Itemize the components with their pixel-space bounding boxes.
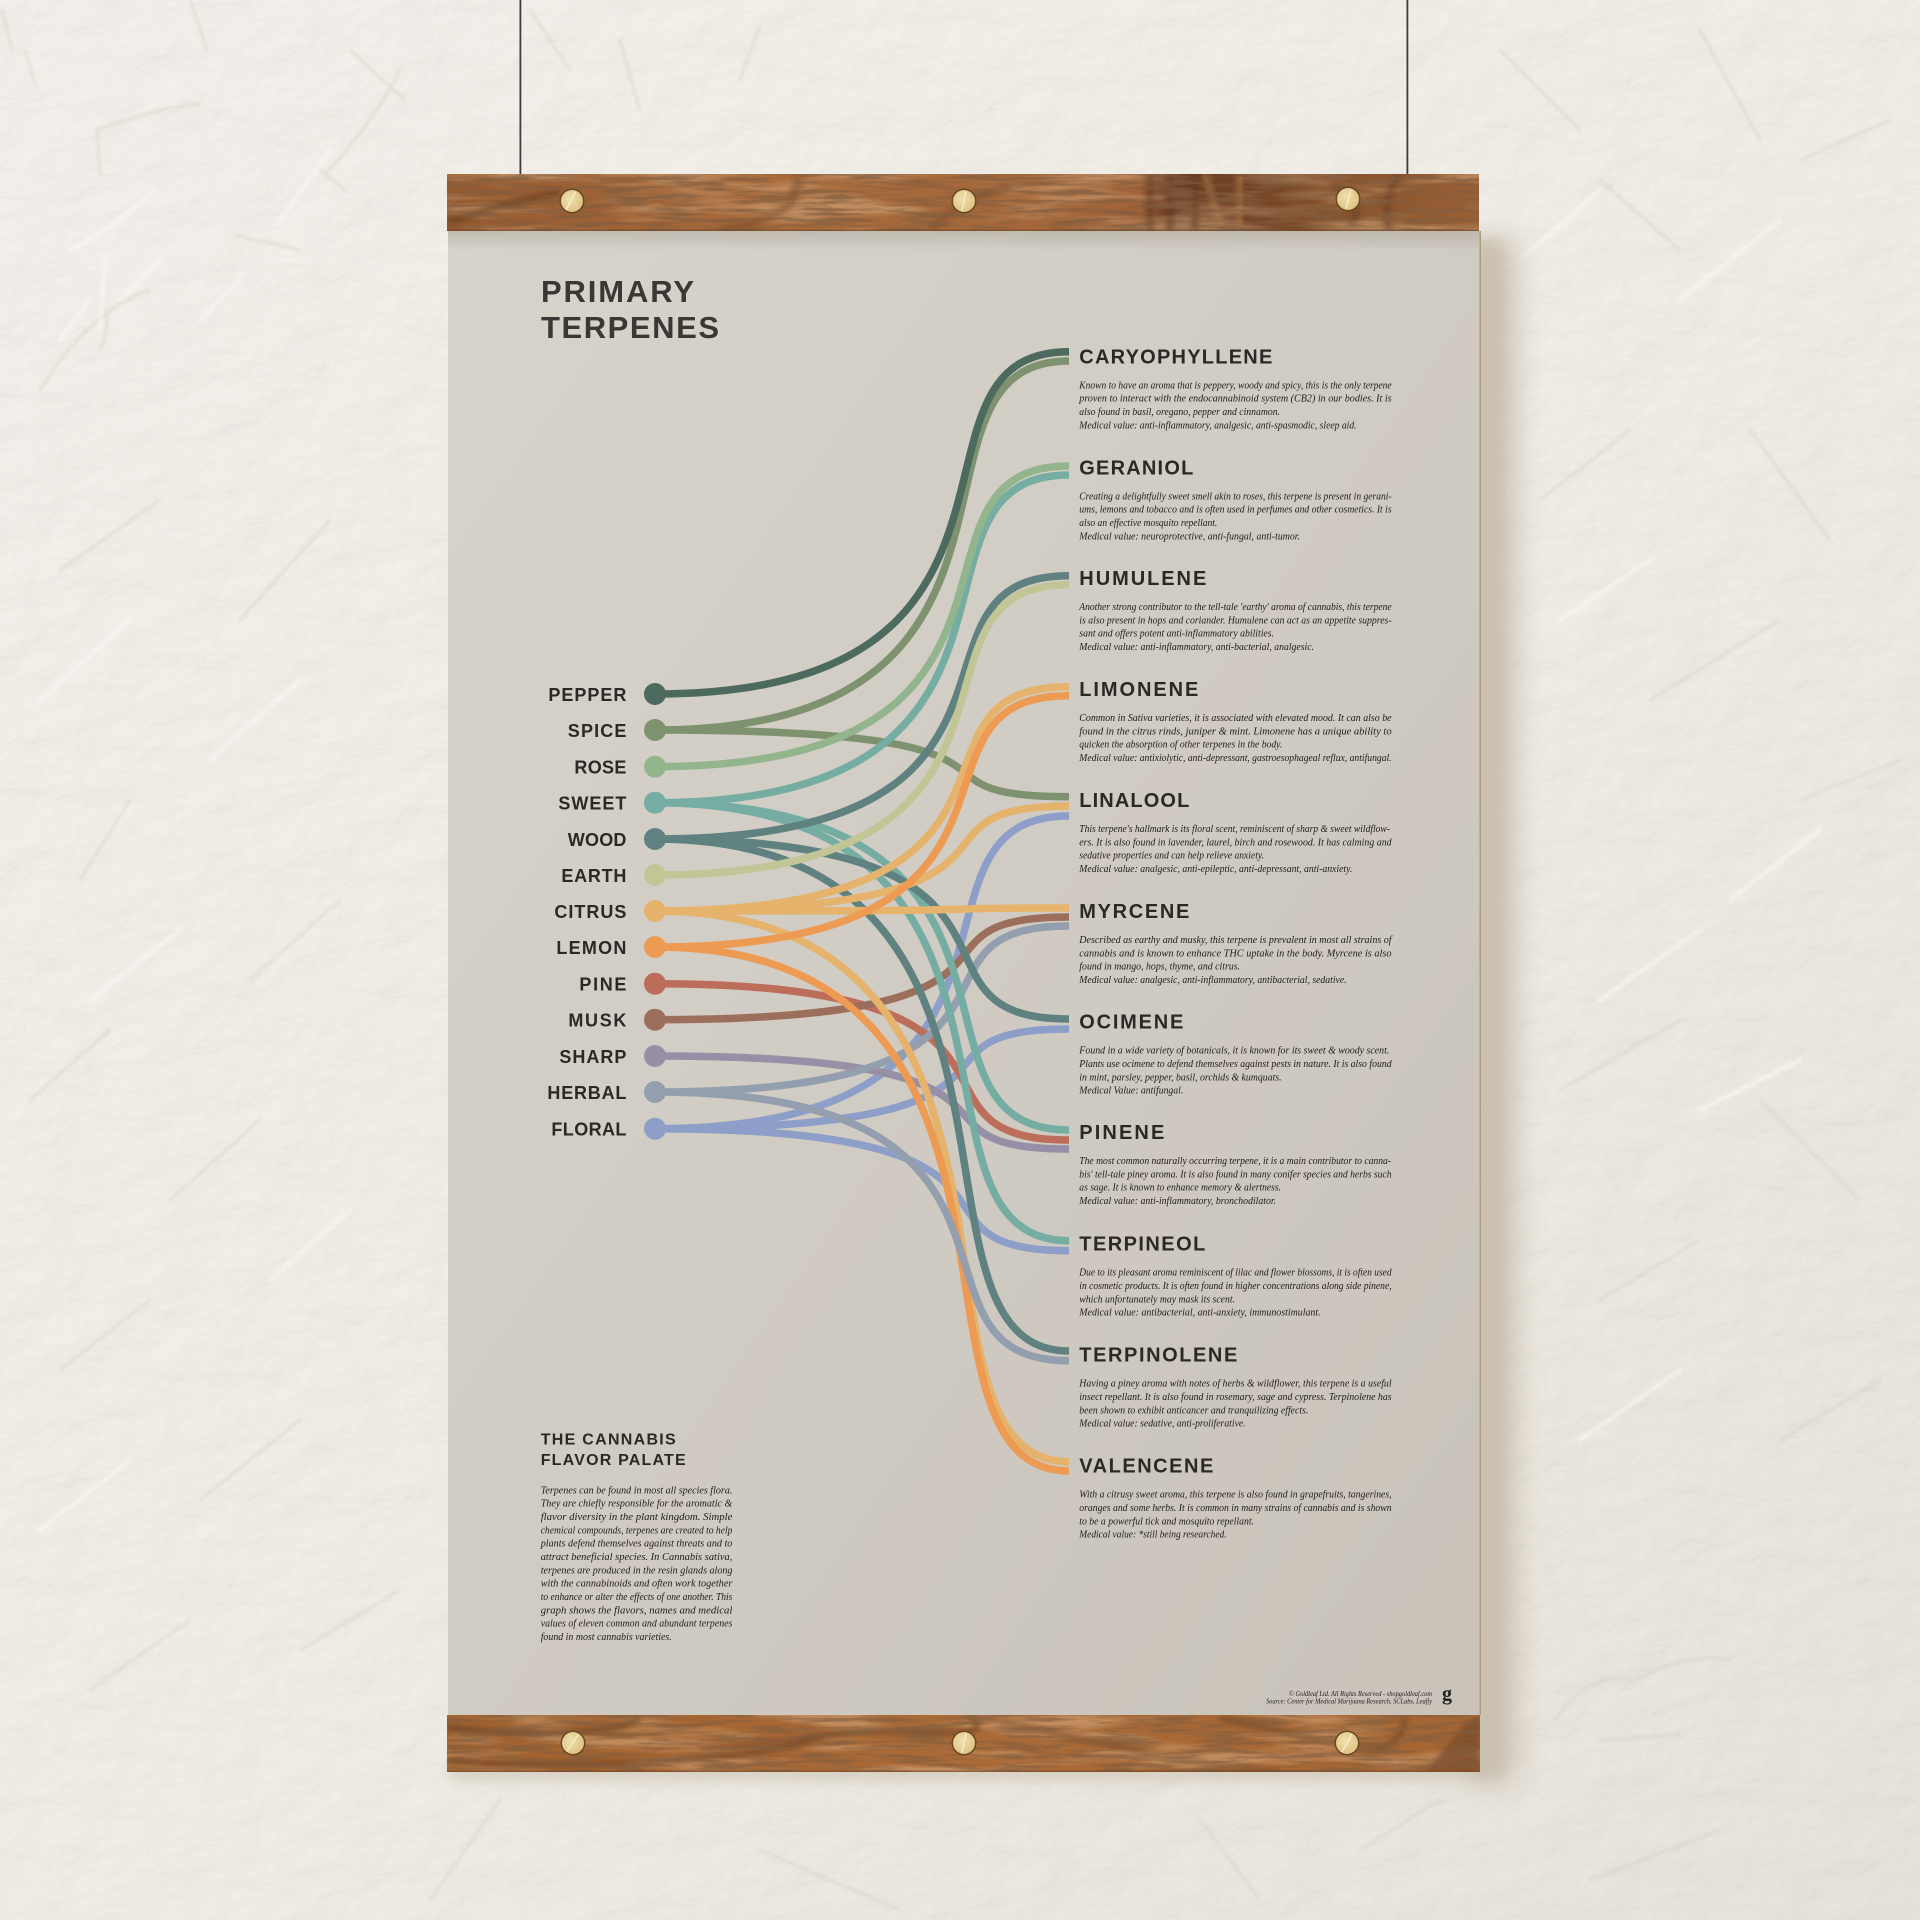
terpene: humulene: is also present in hops and coriander. Humulene can act as an appetite suppres- (1079, 614, 1392, 626)
intro text: terpenes are produced in the resin glands along (541, 1564, 733, 1576)
flavor: musk (568, 1009, 666, 1031)
flavor: sharp (559, 1045, 666, 1067)
terpene: geraniol: Medical value: neuroprotective, anti-fungal, anti-tumor. (1078, 530, 1300, 542)
flavor: herbal: HERBAL (547, 1083, 626, 1103)
terpene: pinene: The most common naturally occurring terpene, it is a main contributor to canna- (1079, 1155, 1391, 1167)
flavor: herbal (547, 1081, 666, 1103)
intro text: chemical compounds, terpenes are created to help (541, 1524, 733, 1536)
hanging wire right (1406, 0, 1408, 174)
terpene: ocimene: Found in a wide variety of botanicals, it is known for its sweet & woody scent. (1078, 1045, 1389, 1057)
flavor: pine: PINE (579, 975, 626, 995)
terpene: ocimene: OCIMENE (1079, 1012, 1183, 1034)
title (541, 274, 719, 345)
terpene: caryophyllene: also found in basil, oregano, pepper and cinnamon. (1079, 406, 1280, 418)
flavor: pepper (548, 683, 666, 705)
terpene: geraniol: GERANIOL (1079, 457, 1193, 479)
terpene: limonene: Common in Sativa varieties, it is associated with elevated mood. It can also be (1079, 712, 1392, 724)
top wooden bar (447, 174, 1479, 231)
terpene: linalool: This terpene's hallmark is its floral scent, reminiscent of sharp & sweet wildflow- (1079, 823, 1390, 835)
terpene: pinene (1078, 1122, 1392, 1207)
terpene: terpineol: Due to its pleasant aroma reminiscent of lilac and flower blossoms, it is often used (1078, 1267, 1392, 1279)
flavor: floral: FLORAL (551, 1120, 626, 1140)
brass screws (560, 186, 1360, 1756)
terpene: terpineol: in cosmetic products. It is often found in higher concentrations along side pinene, (1079, 1280, 1392, 1292)
terpene: terpinolene (1078, 1345, 1392, 1430)
terpene: geraniol (1078, 457, 1392, 542)
terpene: limonene: found in the citrus rinds, juniper & mint. Limonene has a unique ability to (1079, 725, 1392, 737)
terpene: terpinolene: Medical value: sedative, anti-proliferative. (1078, 1418, 1246, 1430)
terpene: geraniol: ums, lemons and tobacco and is often used in perfumes and other cosmetics. It is (1079, 504, 1392, 516)
flavor: citrus (554, 900, 666, 922)
flavor: rose (574, 756, 666, 778)
terpene: terpinolene: been shown to exhibit anticancer and tranquilizing effects. (1079, 1404, 1308, 1416)
terpene: pinene: PINENE (1079, 1122, 1164, 1144)
intro heading (541, 1432, 686, 1469)
terpene: terpineol: Medical value: antibacterial, anti-anxiety, immunostimulant. (1078, 1307, 1321, 1319)
intro text: Terpenes can be found in most all species flora. (541, 1484, 732, 1496)
flavor: wood: WOOD (568, 830, 626, 850)
intro text: attract beneficial species. In Cannabis sativa, (541, 1551, 733, 1563)
terpene: ocimene: Plants use ocimene to defend themselves against pests in nature. It is also found (1078, 1058, 1392, 1070)
intro text (540, 1484, 733, 1643)
intro text: to enhance or alter the effects of one another. This (541, 1591, 732, 1603)
footer credits: © Goldleaf Ltd. All Rights Reserved - shopgoldleaf.com (1289, 1689, 1432, 1698)
terpene: humulene: Medical value: anti-inflammatory, anti-bacterial, analgesic. (1078, 641, 1314, 653)
terpene: caryophyllene: CARYOPHYLLENE (1079, 346, 1272, 368)
flavor: pine (579, 973, 666, 995)
flavor: spice: SPICE (568, 721, 626, 741)
terpene: myrcene: Medical value: analgesic, anti-inflammatory, antibacterial, sedative. (1078, 974, 1347, 986)
terpene: valencene: Medical value: *still being researched. (1078, 1529, 1227, 1541)
terpene: linalool: sedative properties and can help relieve anxiety. (1079, 850, 1264, 862)
intro text: plants defend themselves against threats and to (540, 1538, 733, 1550)
terpene: valencene: VALENCENE (1079, 1456, 1213, 1478)
intro text: They are chiefly responsible for the aromatic & (541, 1498, 733, 1510)
poster sheet (448, 231, 1481, 1715)
terpene: linalool: LINALOOL (1079, 790, 1189, 812)
terpene: terpinolene: insect repellant. It is also found in rosemary, sage and cypress. Terpinolene has (1079, 1391, 1392, 1403)
terpene: limonene: Medical value: antixiolytic, anti-depressant, gastroesophageal reflux, antifungal. (1078, 752, 1392, 764)
terpene: caryophyllene (1078, 346, 1392, 431)
terpene: linalool: ers. It is also found in lavender, laurel, birch and rosewood. It has calming and (1079, 836, 1392, 848)
intro heading: THE CANNABIS (541, 1432, 676, 1449)
terpene: terpineol (1078, 1234, 1392, 1319)
terpene: linalool (1078, 790, 1392, 875)
terpene: caryophyllene: proven to interact with the endocannabinoid system (CB2) in our bodies. It is (1078, 393, 1392, 405)
terpene: ocimene: Medical Value: antifungal. (1078, 1085, 1183, 1097)
terpene: terpineol: TERPINEOL (1079, 1234, 1205, 1256)
terpene: terpinolene: TERPINOLENE (1079, 1345, 1237, 1367)
flavor: spice (568, 719, 666, 741)
logo: g: g (1442, 1683, 1452, 1705)
terpene: geraniol: Creating a delightfully sweet smell akin to roses, this terpene is present in gerani- (1079, 490, 1392, 502)
flavor: sweet (558, 792, 666, 814)
terpene: myrcene: Described as earthy and musky, this terpene is prevalent in most all strains of (1078, 934, 1393, 946)
intro text: graph shows the flavors, names and medical (541, 1604, 732, 1616)
intro panel: the cannabis flavor palate (540, 1432, 733, 1643)
flavor: earth: EARTH (561, 866, 626, 886)
terpene: pinene: bis' tell-tale piney aroma. It is also found in many conifer species and herbs such (1079, 1168, 1392, 1180)
flavor: sweet: SWEET (558, 794, 626, 814)
flavor: lemon: LEMON (556, 938, 626, 958)
flavor: citrus: CITRUS (554, 902, 626, 922)
intro text: flavor diversity in the plant kingdom. Simple (541, 1511, 733, 1523)
terpene: terpineol: which unfortunately may mask its scent. (1079, 1293, 1235, 1305)
wall shadow behind poster (450, 240, 1516, 1782)
flavor: earth (561, 864, 666, 886)
terpene: limonene: LIMONENE (1079, 679, 1198, 701)
terpene: ocimene (1078, 1012, 1392, 1097)
intro heading: FLAVOR PALATE (541, 1452, 686, 1469)
flavor: wood (568, 828, 666, 850)
terpene: valencene: With a citrusy sweet aroma, this terpene is also found in grapefruits, tangerines, (1079, 1489, 1392, 1501)
terpene: linalool: Medical value: analgesic, anti-epileptic, anti-depressant, anti-anxiety. (1078, 863, 1352, 875)
flavor: musk: MUSK (568, 1011, 626, 1031)
terpene: geraniol: also an effective mosquito repellant. (1079, 517, 1217, 529)
terpene: limonene: quicken the absorption of other terpenes in the body. (1079, 739, 1282, 751)
bottom wooden bar (447, 1715, 1480, 1772)
terpene: valencene: oranges and some herbs. It is common in many strains of cannabis and is shown (1079, 1502, 1392, 1514)
terpene: myrcene (1078, 901, 1393, 986)
terpene: caryophyllene: Medical value: anti-inflammatory, analgesic, anti-spasmodic, sleep aid. (1078, 419, 1357, 431)
terpene: valencene: to be a powerful tick and mosquito repellant. (1079, 1515, 1254, 1527)
terpene: terpinolene: Having a piney aroma with notes of herbs & wildflower, this terpene is a useful (1078, 1378, 1392, 1390)
terpene: humulene: HUMULENE (1079, 568, 1206, 590)
intro text: with the cannabinoids and often work together (541, 1578, 733, 1590)
flavor: pepper: PEPPER (548, 685, 626, 705)
chart: flavor-to-terpene flow curves (655, 352, 1069, 1471)
terpene: valencene (1078, 1456, 1392, 1541)
intro text: values of eleven common and abundant terpenes (541, 1618, 732, 1630)
terpene: ocimene: in mint, parsley, pepper, basil, orchids & kumquats. (1079, 1071, 1282, 1083)
intro text: found in most cannabis varieties. (541, 1631, 672, 1643)
terpene: humulene: sant and offers potent anti-inflammatory abilities. (1079, 628, 1274, 640)
flavor: floral (551, 1118, 666, 1140)
terpene: myrcene: found in mango, hops, thyme, and citrus. (1079, 961, 1240, 973)
hanging wire left (520, 0, 521, 174)
flavor list: labels and nodes (547, 683, 666, 1140)
terpene: pinene: Medical value: anti-inflammatory, bronchodilator. (1078, 1195, 1276, 1207)
terpene: caryophyllene: Known to have an aroma that is peppery, woody and spicy, this is the only terpene (1078, 379, 1392, 391)
title: TERPENES (541, 310, 719, 345)
footer credits: Source: Center for Medical Marijuana Research, SCLabs, Leafly (1266, 1697, 1433, 1706)
flavor: rose: ROSE (574, 758, 626, 778)
terpene: pinene: as sage. It is known to enhance memory & alertness. (1079, 1182, 1281, 1194)
terpene: humulene (1078, 568, 1392, 653)
footer credits (1266, 1689, 1433, 1706)
terpene: myrcene: cannabis and is known to enhance THC uptake in the body. Myrcene is also (1079, 947, 1392, 959)
terpene: limonene (1078, 679, 1392, 764)
terpene: myrcene: MYRCENE (1079, 901, 1189, 923)
flavor: lemon (556, 936, 666, 958)
flavor: sharp: SHARP (559, 1047, 626, 1067)
terpene: humulene: Another strong contributor to the tell-tale 'earthy' aroma of cannabis, this terpene (1078, 601, 1392, 613)
title: PRIMARY (541, 274, 694, 309)
